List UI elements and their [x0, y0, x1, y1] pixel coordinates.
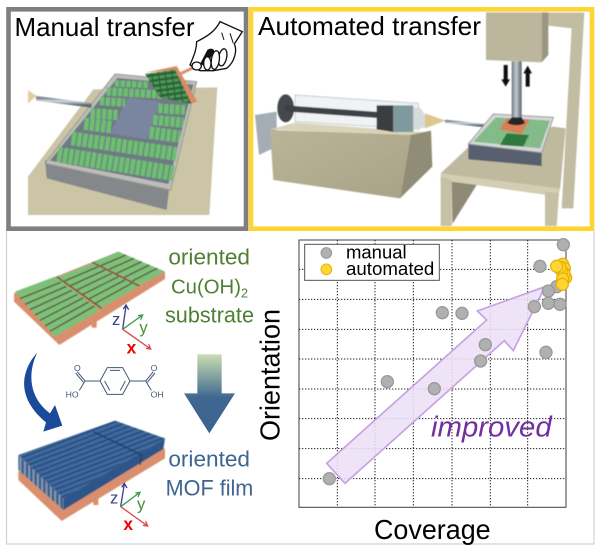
panel: MOF synthesis: [14, 244, 254, 534]
label: oriented Cu(OH)2 substrate: oriented: [168, 244, 250, 269]
data points: automated: [551, 258, 572, 290]
label: oriented MOF film: MOF film: [166, 476, 253, 501]
panel: manual transfer: [8, 9, 246, 229]
arrow: up: [523, 66, 532, 87]
pump mounting plate: [255, 112, 277, 155]
axes: film: y: [137, 495, 146, 514]
molecule: terephthalic acid: HO: [66, 390, 79, 400]
heading: manual transfer: Manual transfer: [14, 12, 195, 42]
held substrate: [145, 66, 197, 104]
icon: glove: [190, 22, 242, 71]
substrate illustration: [14, 252, 165, 345]
sample tray: [468, 114, 553, 166]
legend: automated: [346, 258, 434, 279]
x axis label: Coverage: [374, 514, 491, 545]
curved arrow: [24, 352, 62, 432]
central exposed region: [110, 98, 160, 139]
axes: film: x: [123, 514, 133, 534]
front fins: [18, 455, 63, 510]
copper base: [18, 448, 165, 521]
plot area: [299, 240, 566, 507]
scatter chart: [254, 239, 572, 545]
label: oriented MOF film: oriented: [168, 447, 250, 472]
manual transfer illustration: [28, 66, 217, 215]
strip gaps: [20, 255, 157, 331]
green film: [15, 252, 165, 337]
molecule: terephthalic acid: [66, 363, 164, 400]
molecule: terephthalic acid: OH: [151, 390, 164, 400]
press foot: [507, 117, 525, 125]
data points: manual: [323, 239, 569, 485]
press head: [486, 12, 548, 62]
label: oriented MOF film: [166, 447, 253, 501]
tray top rim: [45, 74, 197, 190]
table: [441, 127, 566, 226]
molecule: terephthalic acid: O: [74, 363, 81, 373]
top fins: [18, 421, 165, 498]
table surface: [28, 87, 217, 215]
rear stand: [543, 13, 584, 208]
axes: film: [110, 483, 148, 534]
panel frame: manual: [8, 9, 246, 229]
side face: [63, 438, 165, 510]
automated transfer illustration: [255, 12, 584, 226]
y axis label: Orientation: [254, 309, 285, 441]
label: oriented Cu(OH)2 substrate: Cu(OH): [171, 276, 241, 298]
tray front side: [45, 160, 170, 210]
pump box: [270, 123, 432, 198]
process arrow: [184, 354, 235, 433]
legend: manual: [346, 241, 407, 262]
axes: substrate: y: [139, 318, 148, 337]
label: oriented Cu(OH)2 substrate: [165, 244, 254, 327]
label: oriented Cu(OH)2 substrate: 2: [241, 286, 248, 300]
legend: [305, 241, 439, 280]
syringe: [277, 94, 446, 132]
axes: substrate: [112, 305, 151, 358]
heading: automated transfer: Automated transfer: [258, 11, 481, 41]
panel: automated transfer: [251, 9, 592, 229]
axes: substrate: x: [127, 338, 137, 358]
press rod: [512, 61, 522, 119]
needle hub: [28, 90, 37, 103]
label: oriented Cu(OH)2 substrate: substrate: [165, 302, 254, 327]
green substrate rows: [58, 83, 185, 173]
tubing needle: [445, 121, 486, 126]
tray liquid: [50, 78, 193, 184]
axes: substrate: z: [112, 310, 120, 329]
copper base: [14, 252, 165, 345]
molecule: terephthalic acid: O: [151, 363, 158, 373]
annotation: improved: improved: [431, 412, 553, 444]
panel frame: automated: [251, 9, 592, 229]
MOF film illustration: [18, 421, 165, 521]
arrow: improvement trend: [327, 287, 545, 483]
panel: synthesis and chart frame: [6, 231, 594, 544]
arrow: down: [501, 65, 510, 87]
needle: [36, 98, 92, 105]
axes: film: z: [110, 488, 118, 507]
